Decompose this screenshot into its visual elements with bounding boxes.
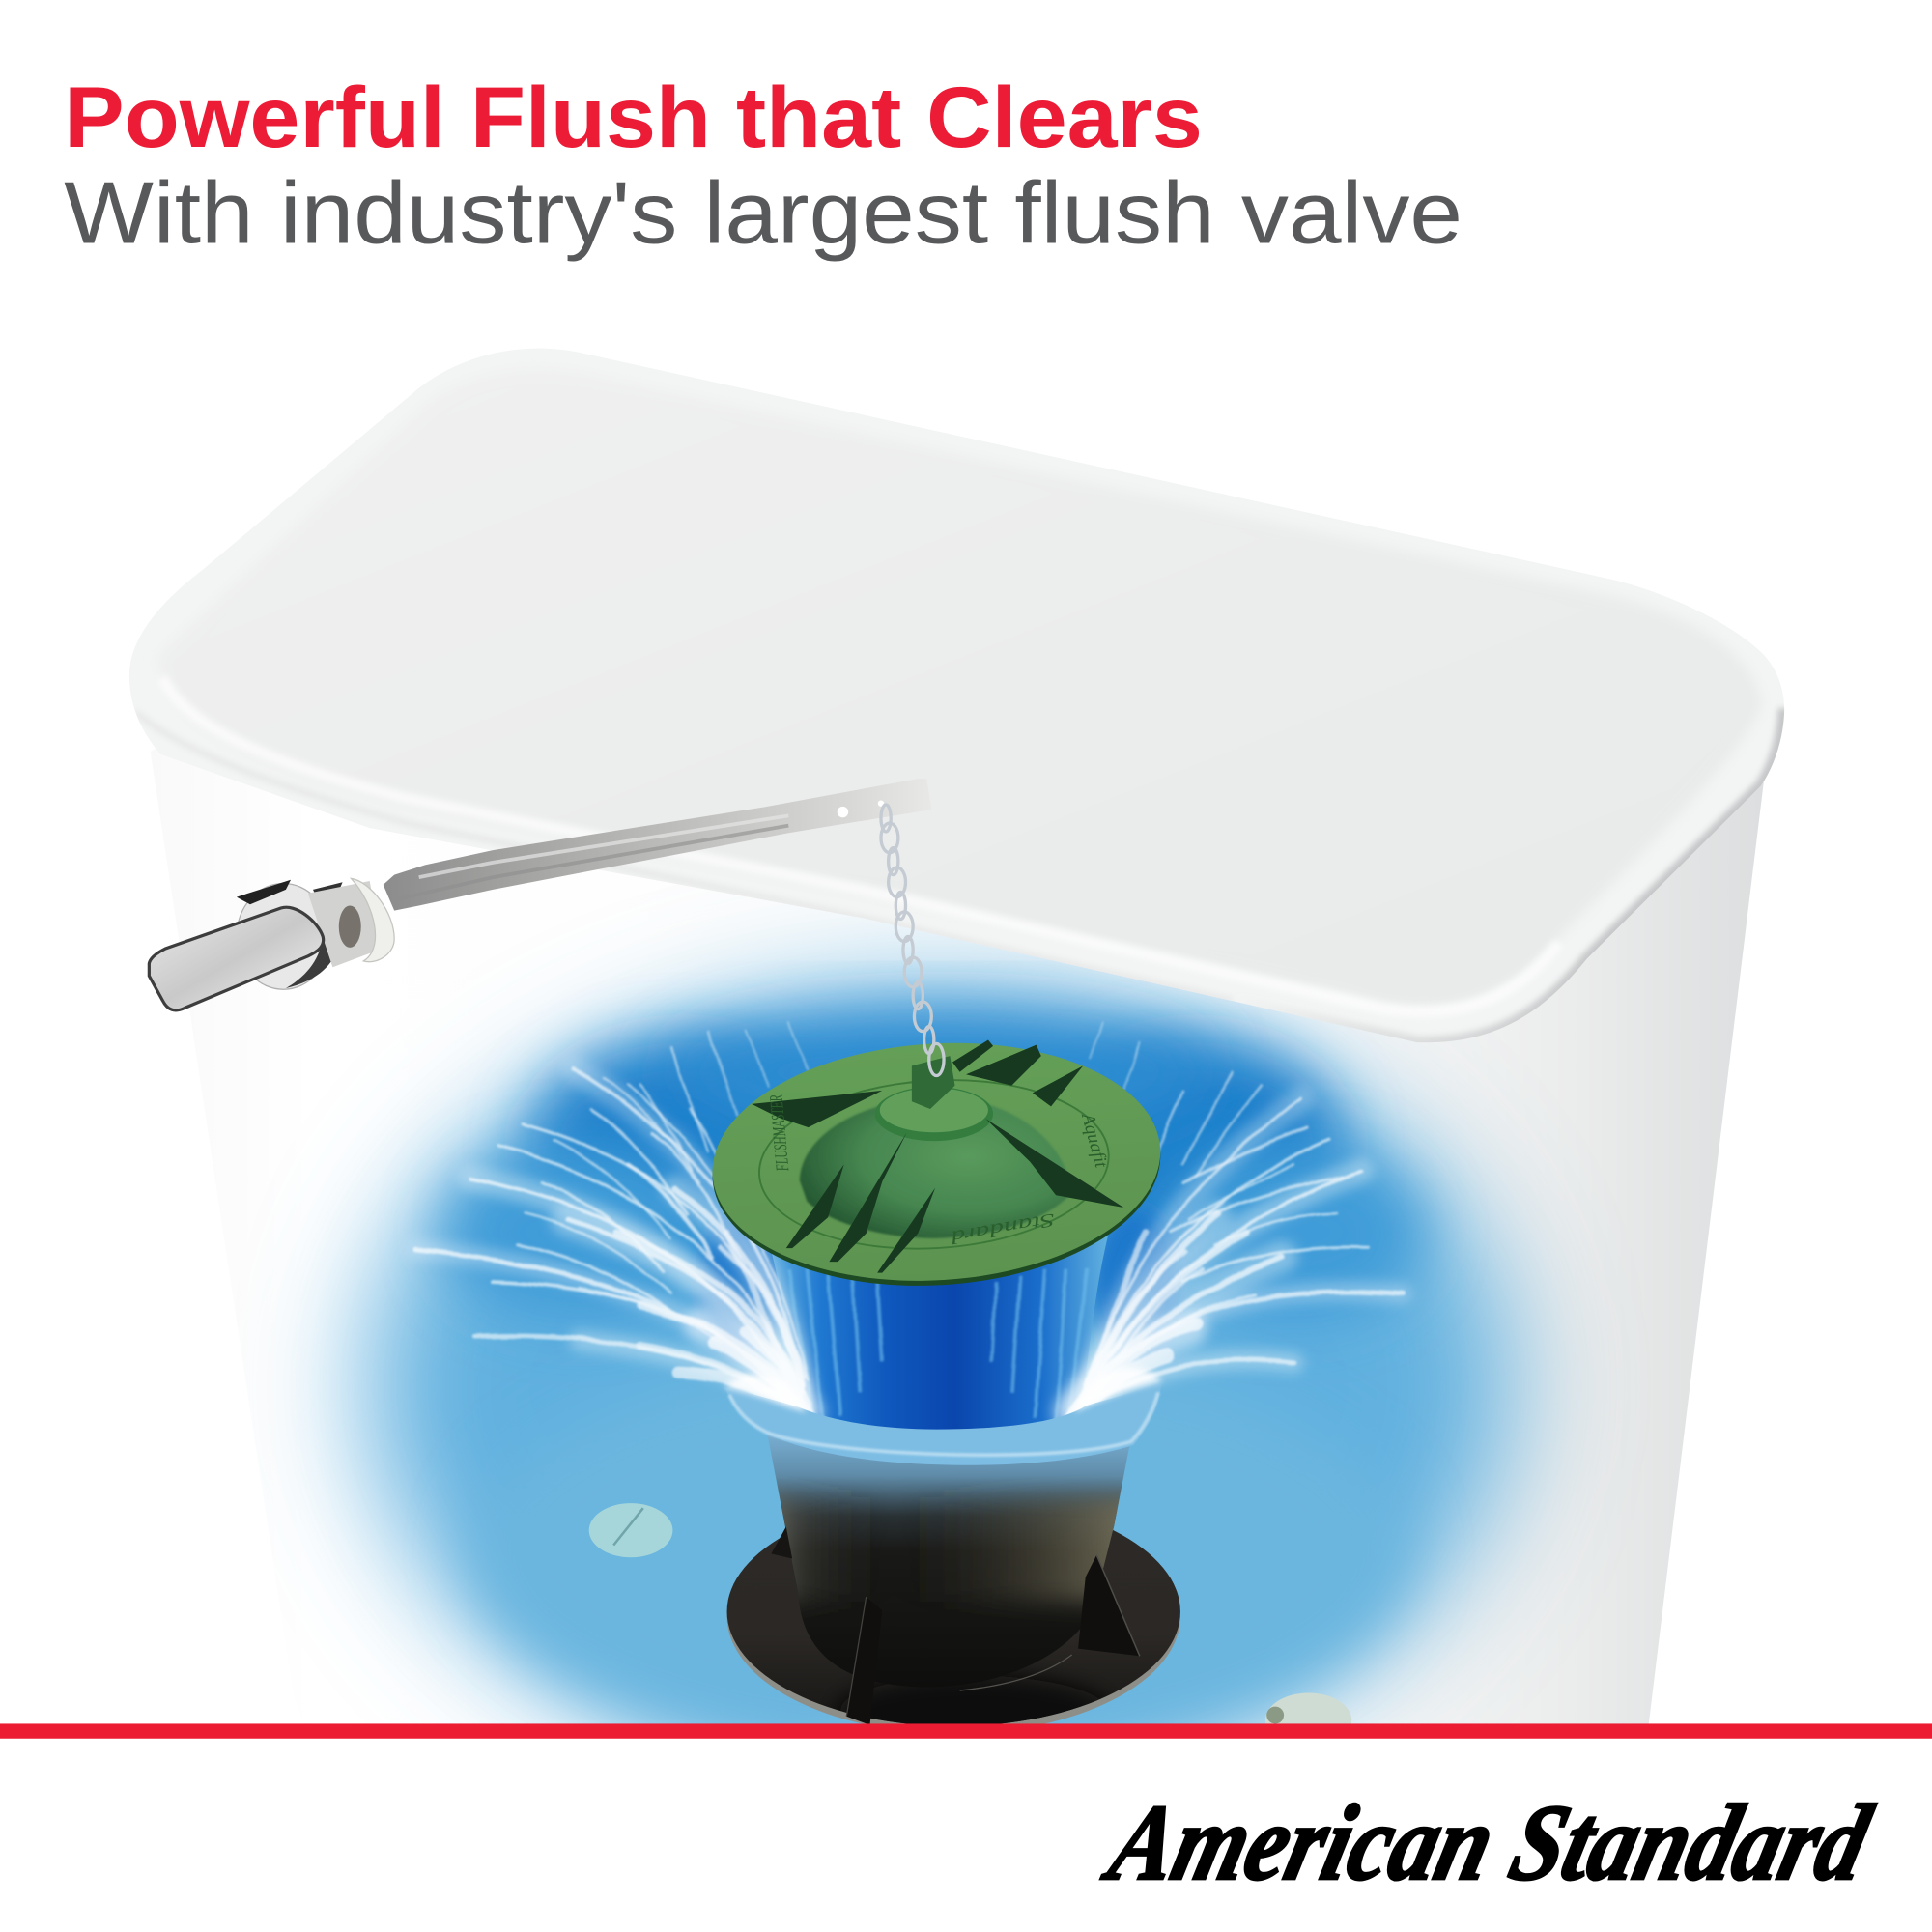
white bushing bbox=[352, 878, 394, 962]
heading: Powerful Flush that Clears: Powerful Flush that Clears bbox=[64, 69, 1203, 165]
flapper lettering: Aquafit bbox=[1077, 1109, 1111, 1171]
base gussets bbox=[771, 1526, 1140, 1725]
flapper lettering bbox=[766, 1094, 1111, 1247]
flapper dome bbox=[800, 1096, 1072, 1238]
flush lever arm bbox=[384, 779, 931, 911]
flapper text ring bbox=[754, 1070, 1114, 1259]
flapper hub bbox=[875, 1087, 993, 1141]
green flapper bbox=[705, 1030, 1168, 1298]
funnel core water bbox=[766, 1233, 1109, 1435]
red divider bar bbox=[0, 1723, 1932, 1739]
title bbox=[64, 69, 1463, 262]
fan mist right bbox=[1072, 1099, 1403, 1412]
plug right bbox=[1265, 1693, 1351, 1747]
trip lever handle bbox=[149, 878, 394, 1010]
flapper lug bbox=[912, 1056, 955, 1109]
flapper lettering: Standard bbox=[949, 1208, 1056, 1247]
flapper fins bbox=[752, 1040, 1123, 1273]
base arc highlight bbox=[960, 1655, 1072, 1690]
valve base flange bbox=[726, 1530, 1180, 1723]
funnel core streaks bbox=[788, 1269, 1087, 1430]
chain bbox=[881, 805, 944, 1076]
rosette bbox=[237, 884, 330, 989]
tank lid bbox=[129, 349, 1784, 1042]
rim foam bbox=[724, 1368, 1162, 1412]
water streaks: left fan bbox=[416, 1023, 809, 1414]
water streaks: right fan bbox=[1072, 1023, 1403, 1417]
handle blade bbox=[149, 907, 324, 1010]
blue water glow bbox=[366, 992, 1512, 1780]
subheading: largest flush valve: With industry's largest flush valve bbox=[64, 164, 1463, 262]
fan mist left bbox=[416, 1068, 806, 1412]
flapper lettering: FLUSHMASTER bbox=[766, 1094, 793, 1173]
plug left bbox=[589, 1503, 672, 1557]
toilet tank illustration bbox=[129, 349, 1784, 1780]
rim highlights bbox=[729, 1392, 1158, 1455]
tube rim bbox=[724, 1381, 1162, 1465]
overflow tube column bbox=[757, 1435, 1140, 1690]
shaft collar bbox=[308, 881, 382, 967]
flapper disc bbox=[705, 1033, 1168, 1298]
tank body bbox=[1353, 781, 1764, 1723]
